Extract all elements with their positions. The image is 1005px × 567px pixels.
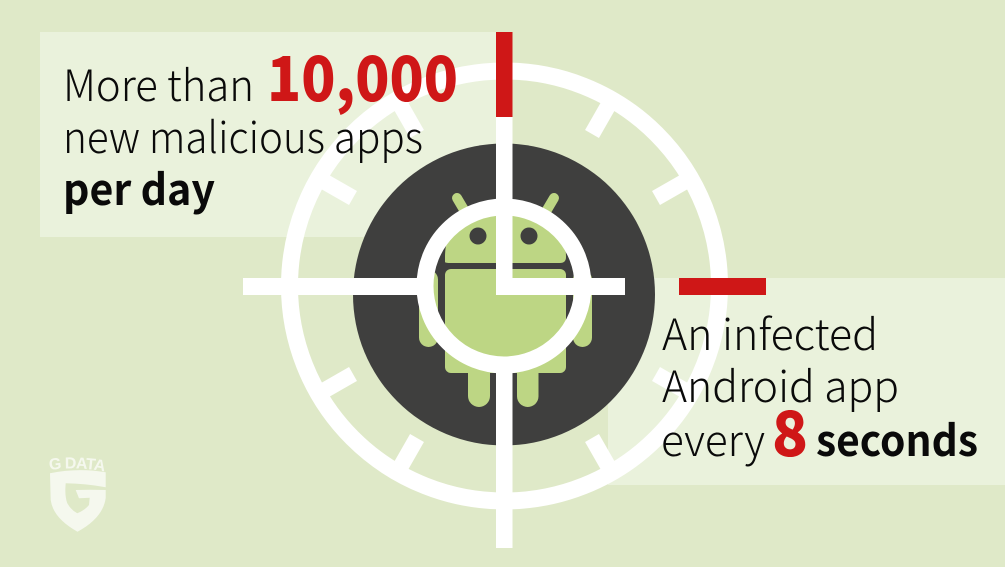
logo: G DATA <box>50 457 106 532</box>
crosshair tick marks <box>318 99 691 473</box>
android right arm <box>573 270 592 347</box>
text: an infected: An infected <box>662 301 878 363</box>
text: every: every <box>661 407 765 469</box>
panel: infected app frequency <box>608 278 1005 485</box>
red right crosshair marker <box>679 278 766 295</box>
text block: every 8 seconds <box>661 301 978 474</box>
text: new malicious apps: new malicious apps <box>63 104 423 166</box>
android left arm <box>419 270 438 347</box>
text block: more than 10,000 <box>63 29 458 218</box>
android right eye <box>520 228 538 244</box>
red top crosshair marker <box>496 32 512 117</box>
crosshair upper and centre arm <box>496 117 512 295</box>
crosshair outer ring <box>290 71 720 501</box>
text: per day: per day <box>63 156 215 218</box>
crosshair lower arm <box>496 360 512 548</box>
crosshair inner ring <box>425 207 583 365</box>
text: more than: More than <box>63 52 254 114</box>
panel: malicious apps per day <box>40 32 496 237</box>
text: android app: Android app <box>662 353 899 415</box>
logo wordmark: G DATA <box>50 457 104 472</box>
crosshair right arm <box>496 278 625 295</box>
number: 8: 8 <box>772 384 808 474</box>
android left eye <box>470 228 486 244</box>
android antennae <box>457 198 554 220</box>
android right leg <box>517 360 538 407</box>
crosshair left arm <box>243 278 423 295</box>
number: 10,000: 10,000 <box>267 29 458 119</box>
icon: android robot <box>419 198 592 407</box>
logo shield <box>50 470 106 532</box>
android head <box>445 200 566 263</box>
android left leg <box>468 360 490 407</box>
android body <box>445 269 566 373</box>
dark target disc <box>353 144 655 446</box>
text: seconds: seconds <box>816 407 978 469</box>
